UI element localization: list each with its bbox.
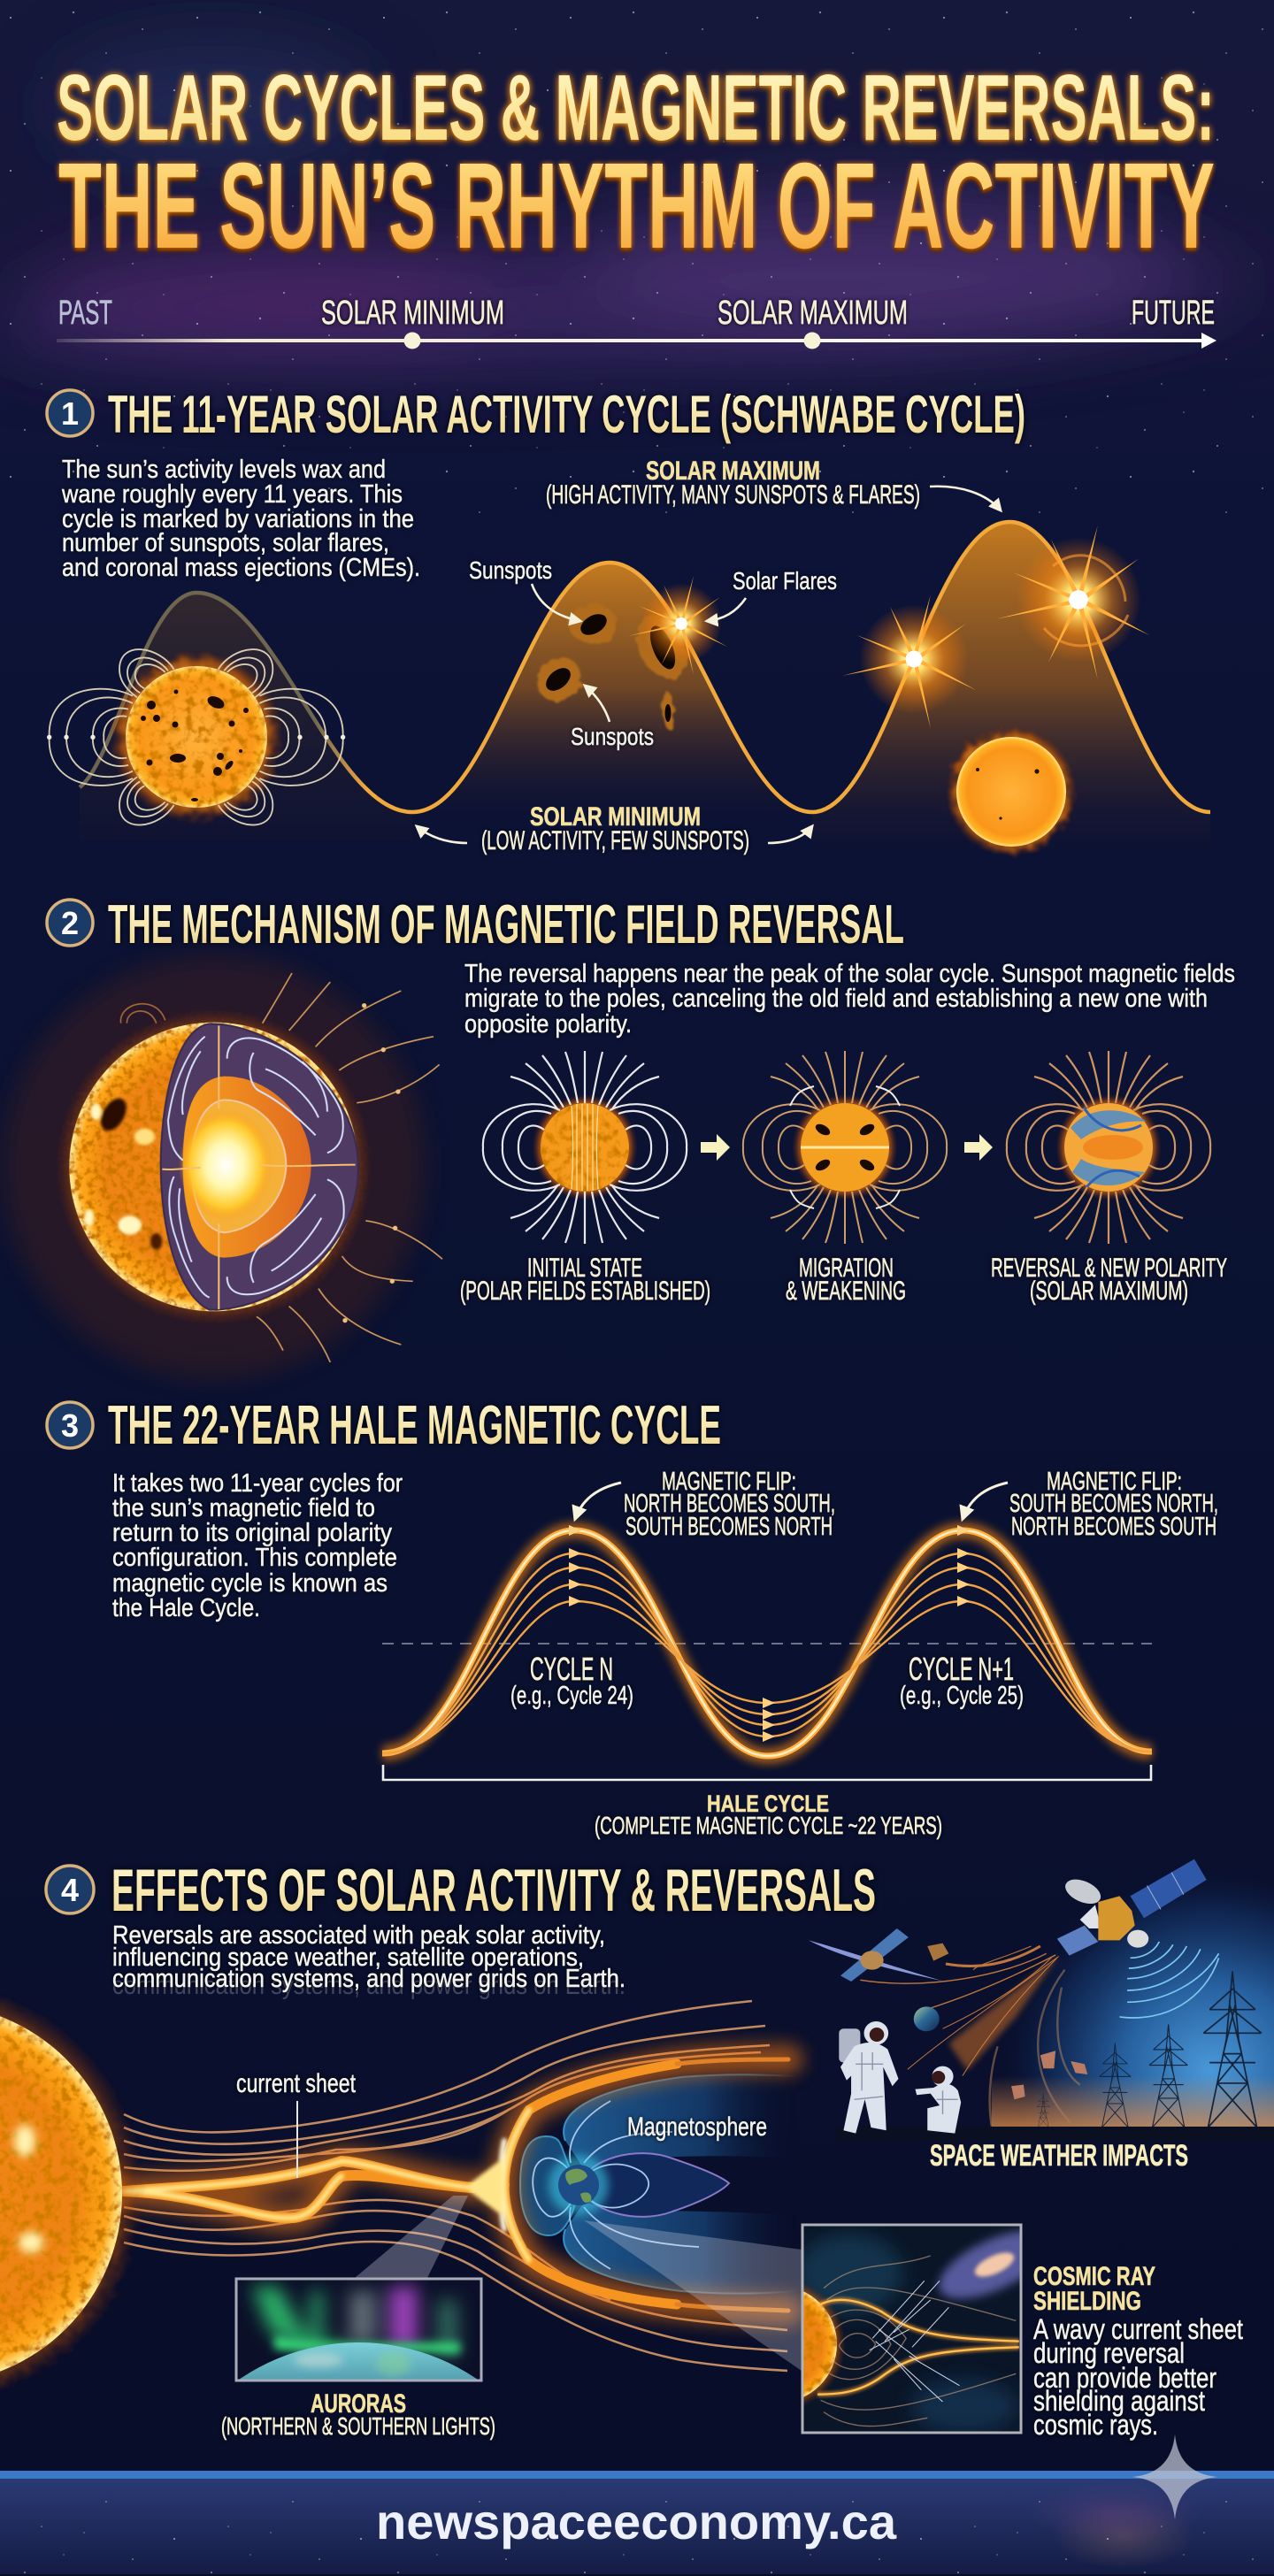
flip arrows: [575, 1483, 1008, 1519]
section 1 description: and coronal mass ejections (CMEs).: [62, 554, 420, 582]
section 1 description: The sun’s activity levels wax and: [62, 456, 386, 484]
section 1 description: number of sunspots, solar flares,: [62, 529, 389, 557]
cosmic ray callout beam: [584, 2220, 802, 2371]
current sheet: [124, 2059, 788, 2311]
cosmic ray shielding text: SHIELDING: [1033, 2287, 1141, 2316]
section 3 panel: [47, 1395, 1218, 1839]
section 2 heading: 2: [61, 905, 79, 941]
magnetosphere label: Magnetosphere: [627, 2112, 767, 2142]
arrow: [701, 1134, 730, 1161]
aurora labels: AURORAS: [311, 2389, 406, 2419]
cycle labels: [510, 1651, 1024, 1710]
quiet sun: [946, 726, 1077, 857]
cycle labels: (e.g., Cycle 25): [900, 1682, 1024, 1710]
timeline: SOLAR MINIMUM: [321, 295, 504, 332]
section 4 panel: [0, 1859, 1274, 2442]
chart labels: (HIGH ACTIVITY, MANY SUNSPOTS & FLARES): [546, 480, 920, 510]
footer url: newspaceeconomy.ca: [376, 2494, 897, 2549]
section 2 description: [464, 960, 1235, 1039]
hale cycle label: [595, 1790, 942, 1839]
diagram: initial state: [483, 1051, 687, 1244]
section 3 description: [112, 1469, 403, 1622]
sunspots on curve: [528, 604, 695, 728]
hale cycle label: (COMPLETE MAGNETIC CYCLE ~22 YEARS): [595, 1812, 942, 1839]
section 3 description: It takes two 11-year cycles for: [112, 1469, 403, 1498]
cosmic ray shielding text: shielding against: [1033, 2385, 1205, 2417]
timeline: PAST: [58, 295, 112, 332]
chart labels: Solar Flares: [733, 567, 837, 594]
timeline: FUTURE: [1132, 295, 1215, 332]
section 4 description: [112, 1921, 625, 2000]
magnetic flip labels: [624, 1468, 1218, 1541]
magnetosphere: [520, 2074, 796, 2294]
arrow: [964, 1134, 993, 1161]
magnetic flip labels: MAGNETIC FLIP:: [662, 1468, 796, 1496]
chart arrows: [417, 487, 1001, 843]
section 4 description: communication systems, and power grids on Earth.: [112, 1972, 625, 2000]
diagram labels: INITIAL STATE: [527, 1254, 642, 1283]
section 1 description: [61, 456, 420, 582]
section 3 description: configuration. This complete: [112, 1544, 397, 1572]
footer: [0, 2471, 1274, 2574]
aurora labels: [221, 2389, 495, 2440]
cycle labels: (e.g., Cycle 24): [510, 1682, 633, 1710]
activity curve chart: [80, 522, 1210, 849]
hale cycle curves: [382, 1525, 1152, 1756]
section 4 description: communication systems, and power grids on Earth.: [112, 1965, 625, 1993]
section 3 heading: 3: [61, 1407, 79, 1444]
section 1 panel: [47, 385, 1210, 857]
diagram labels: (POLAR FIELDS ESTABLISHED): [460, 1276, 710, 1306]
sun interior cutaway: [2, 954, 442, 1379]
current sheet label: [236, 2069, 357, 2178]
magnetic flip labels: SOUTH BECOMES NORTH: [625, 1513, 833, 1541]
diagram: reversal and new polarity: [1007, 1051, 1210, 1244]
auroras inset: [235, 2277, 483, 2381]
section 2 heading: [47, 894, 904, 955]
diagram labels: [460, 1254, 1227, 1306]
timeline: SOLAR MAXIMUM: [718, 295, 908, 332]
cycle labels: CYCLE N: [530, 1651, 613, 1687]
diagram labels: & WEAKENING: [786, 1276, 906, 1306]
section 3 description: the Hale Cycle.: [112, 1594, 260, 1622]
cosmic ray shielding text: cosmic rays.: [1033, 2409, 1158, 2441]
section 3 heading: [47, 1395, 721, 1456]
chart labels: SOLAR MINIMUM: [530, 802, 701, 832]
section 3 heading: THE 22-YEAR HALE MAGNETIC CYCLE: [108, 1395, 721, 1456]
chart labels: (LOW ACTIVITY, FEW SUNSPOTS): [481, 826, 749, 855]
section 1 description: wane roughly every 11 years. This: [61, 480, 403, 509]
section 3 description: the sun’s magnetic field to: [112, 1494, 375, 1522]
cosmic ray shielding text: COSMIC RAY: [1033, 2262, 1155, 2291]
timeline: [57, 295, 1216, 349]
sparkle star: [1132, 2434, 1217, 2519]
magnetic flip labels: MAGNETIC FLIP:: [1047, 1468, 1182, 1496]
section 4 description: Reversals are associated with peak solar activity,: [112, 1921, 605, 1950]
chart labels: Sunspots: [469, 556, 552, 584]
chart labels: [469, 456, 920, 855]
section 2 panel: [2, 894, 1235, 1379]
cosmic ray shielding text: [1033, 2262, 1243, 2441]
section 3 description: magnetic cycle is known as: [112, 1569, 388, 1598]
cycle labels: CYCLE N+1: [909, 1651, 1014, 1687]
diagram labels: MIGRATION: [799, 1254, 894, 1283]
solar flares: [628, 525, 1150, 728]
cosmic ray shielding text: can provide better: [1033, 2362, 1216, 2394]
section 4 heading: [46, 1857, 876, 1924]
diagram labels: (SOLAR MAXIMUM): [1030, 1276, 1188, 1306]
section 2 description: opposite polarity.: [464, 1010, 632, 1039]
nebula band: [0, 44, 1258, 389]
section 4 heading: 4: [61, 1872, 79, 1908]
chart labels: SOLAR MAXIMUM: [646, 456, 820, 486]
hale bracket: [383, 1765, 1151, 1780]
hale cycle label: HALE CYCLE: [707, 1790, 829, 1817]
section 1 description: cycle is marked by variations in the: [62, 505, 414, 533]
chart labels: Sunspots: [571, 723, 654, 750]
left sun: [0, 1982, 144, 2406]
space weather scene: [809, 1849, 1274, 2144]
section 4 description: influencing space weather, satellite operations,: [112, 1944, 584, 1972]
solar wind field lines: [124, 2001, 787, 2371]
current sheet label: current sheet: [236, 2069, 357, 2098]
magnetic flip labels: NORTH BECOMES SOUTH,: [624, 1490, 835, 1518]
section 3 description: return to its original polarity: [112, 1519, 392, 1547]
diagram: migration: [743, 1051, 947, 1244]
cosmic ray inset: [711, 2217, 1059, 2434]
aurora callout beam: [355, 2196, 468, 2278]
active sun with field loops: [47, 649, 345, 825]
cosmic ray shielding text: during reversal: [1033, 2337, 1185, 2369]
title: [57, 56, 1215, 274]
star field: [0, 0, 1274, 531]
aurora labels: (NORTHERN & SOUTHERN LIGHTS): [221, 2412, 495, 2440]
section 1 heading: 1: [61, 395, 79, 432]
